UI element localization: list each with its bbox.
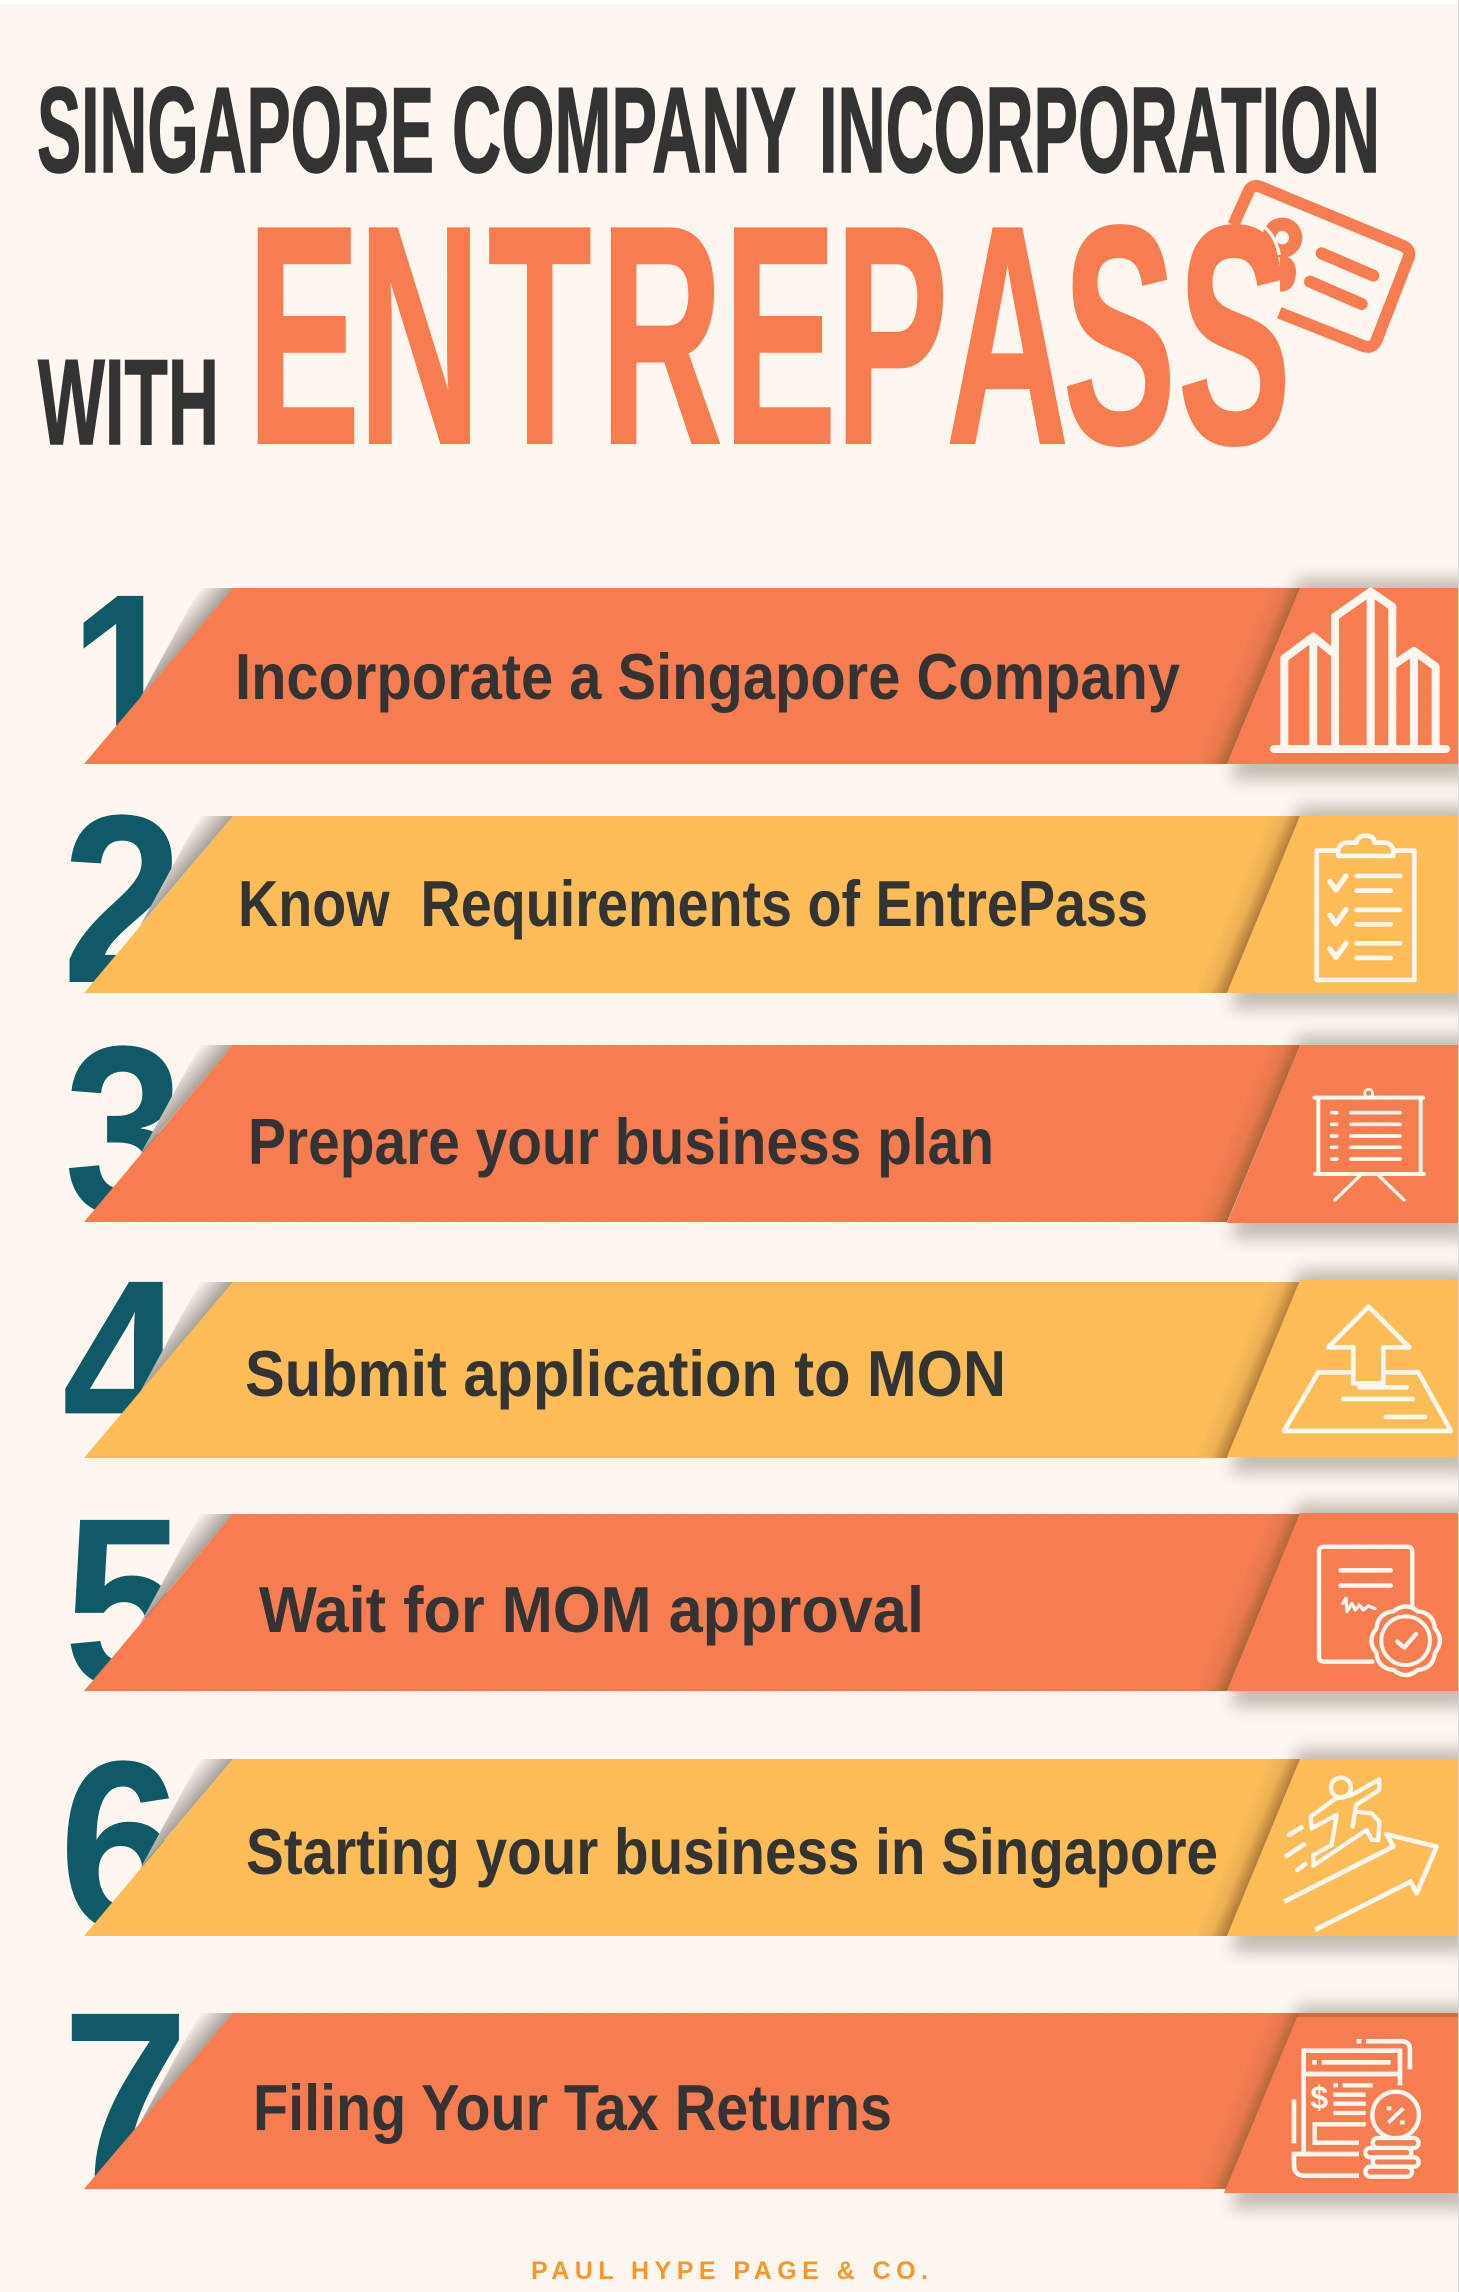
- title: with: WITH: [38, 334, 219, 470]
- label 4: Submit application to MON: [245, 1337, 1006, 1410]
- icon: signed document with badge: [1319, 1547, 1440, 1675]
- label 2: Know Requirements of EntrePass: [238, 867, 1148, 940]
- step 1: [55, 544, 1459, 812]
- number 3: 3: [64, 996, 184, 1264]
- number 1: 1: [70, 544, 180, 812]
- label 3: Prepare your business plan: [248, 1105, 994, 1178]
- icon: runner on rising arrow: [1284, 1778, 1437, 1930]
- number 5: 5: [64, 1468, 184, 1736]
- number 2: 2: [62, 765, 183, 1033]
- step 6: [59, 1711, 1459, 1979]
- dollar sign: $: [1310, 2079, 1328, 2115]
- icon: clipboard checklist: [1317, 836, 1414, 980]
- step 4: [62, 1230, 1459, 1498]
- footer credit: PAUL HYPE PAGE & CO.: [531, 2257, 928, 2285]
- step 3: [64, 996, 1459, 1264]
- step 7: [62, 1962, 1459, 2230]
- icon: upload arrow: [1284, 1307, 1451, 1431]
- number 7: 7: [62, 1962, 189, 2230]
- label 5: Wait for MOM approval: [259, 1573, 924, 1646]
- label 1: Incorporate a Singapore Company: [235, 640, 1180, 713]
- step 2: [62, 765, 1459, 1033]
- label 6: Starting your business in Singapore: [246, 1815, 1218, 1888]
- icon: presentation board: [1314, 1089, 1424, 1200]
- number 4: 4: [62, 1230, 184, 1498]
- title: line one: COMPANY: [452, 62, 795, 198]
- icon: id card: [1233, 186, 1409, 347]
- title: entrepass: ENTREPASS: [247, 162, 1291, 510]
- step 5: [64, 1468, 1459, 1736]
- number 6: 6: [59, 1711, 181, 1979]
- icon: tax documents and coins: [1294, 2041, 1419, 2177]
- icon: buildings: [1274, 592, 1446, 749]
- label 7: Filing Your Tax Returns: [253, 2071, 892, 2144]
- title: line one: SINGAPORE: [37, 62, 434, 198]
